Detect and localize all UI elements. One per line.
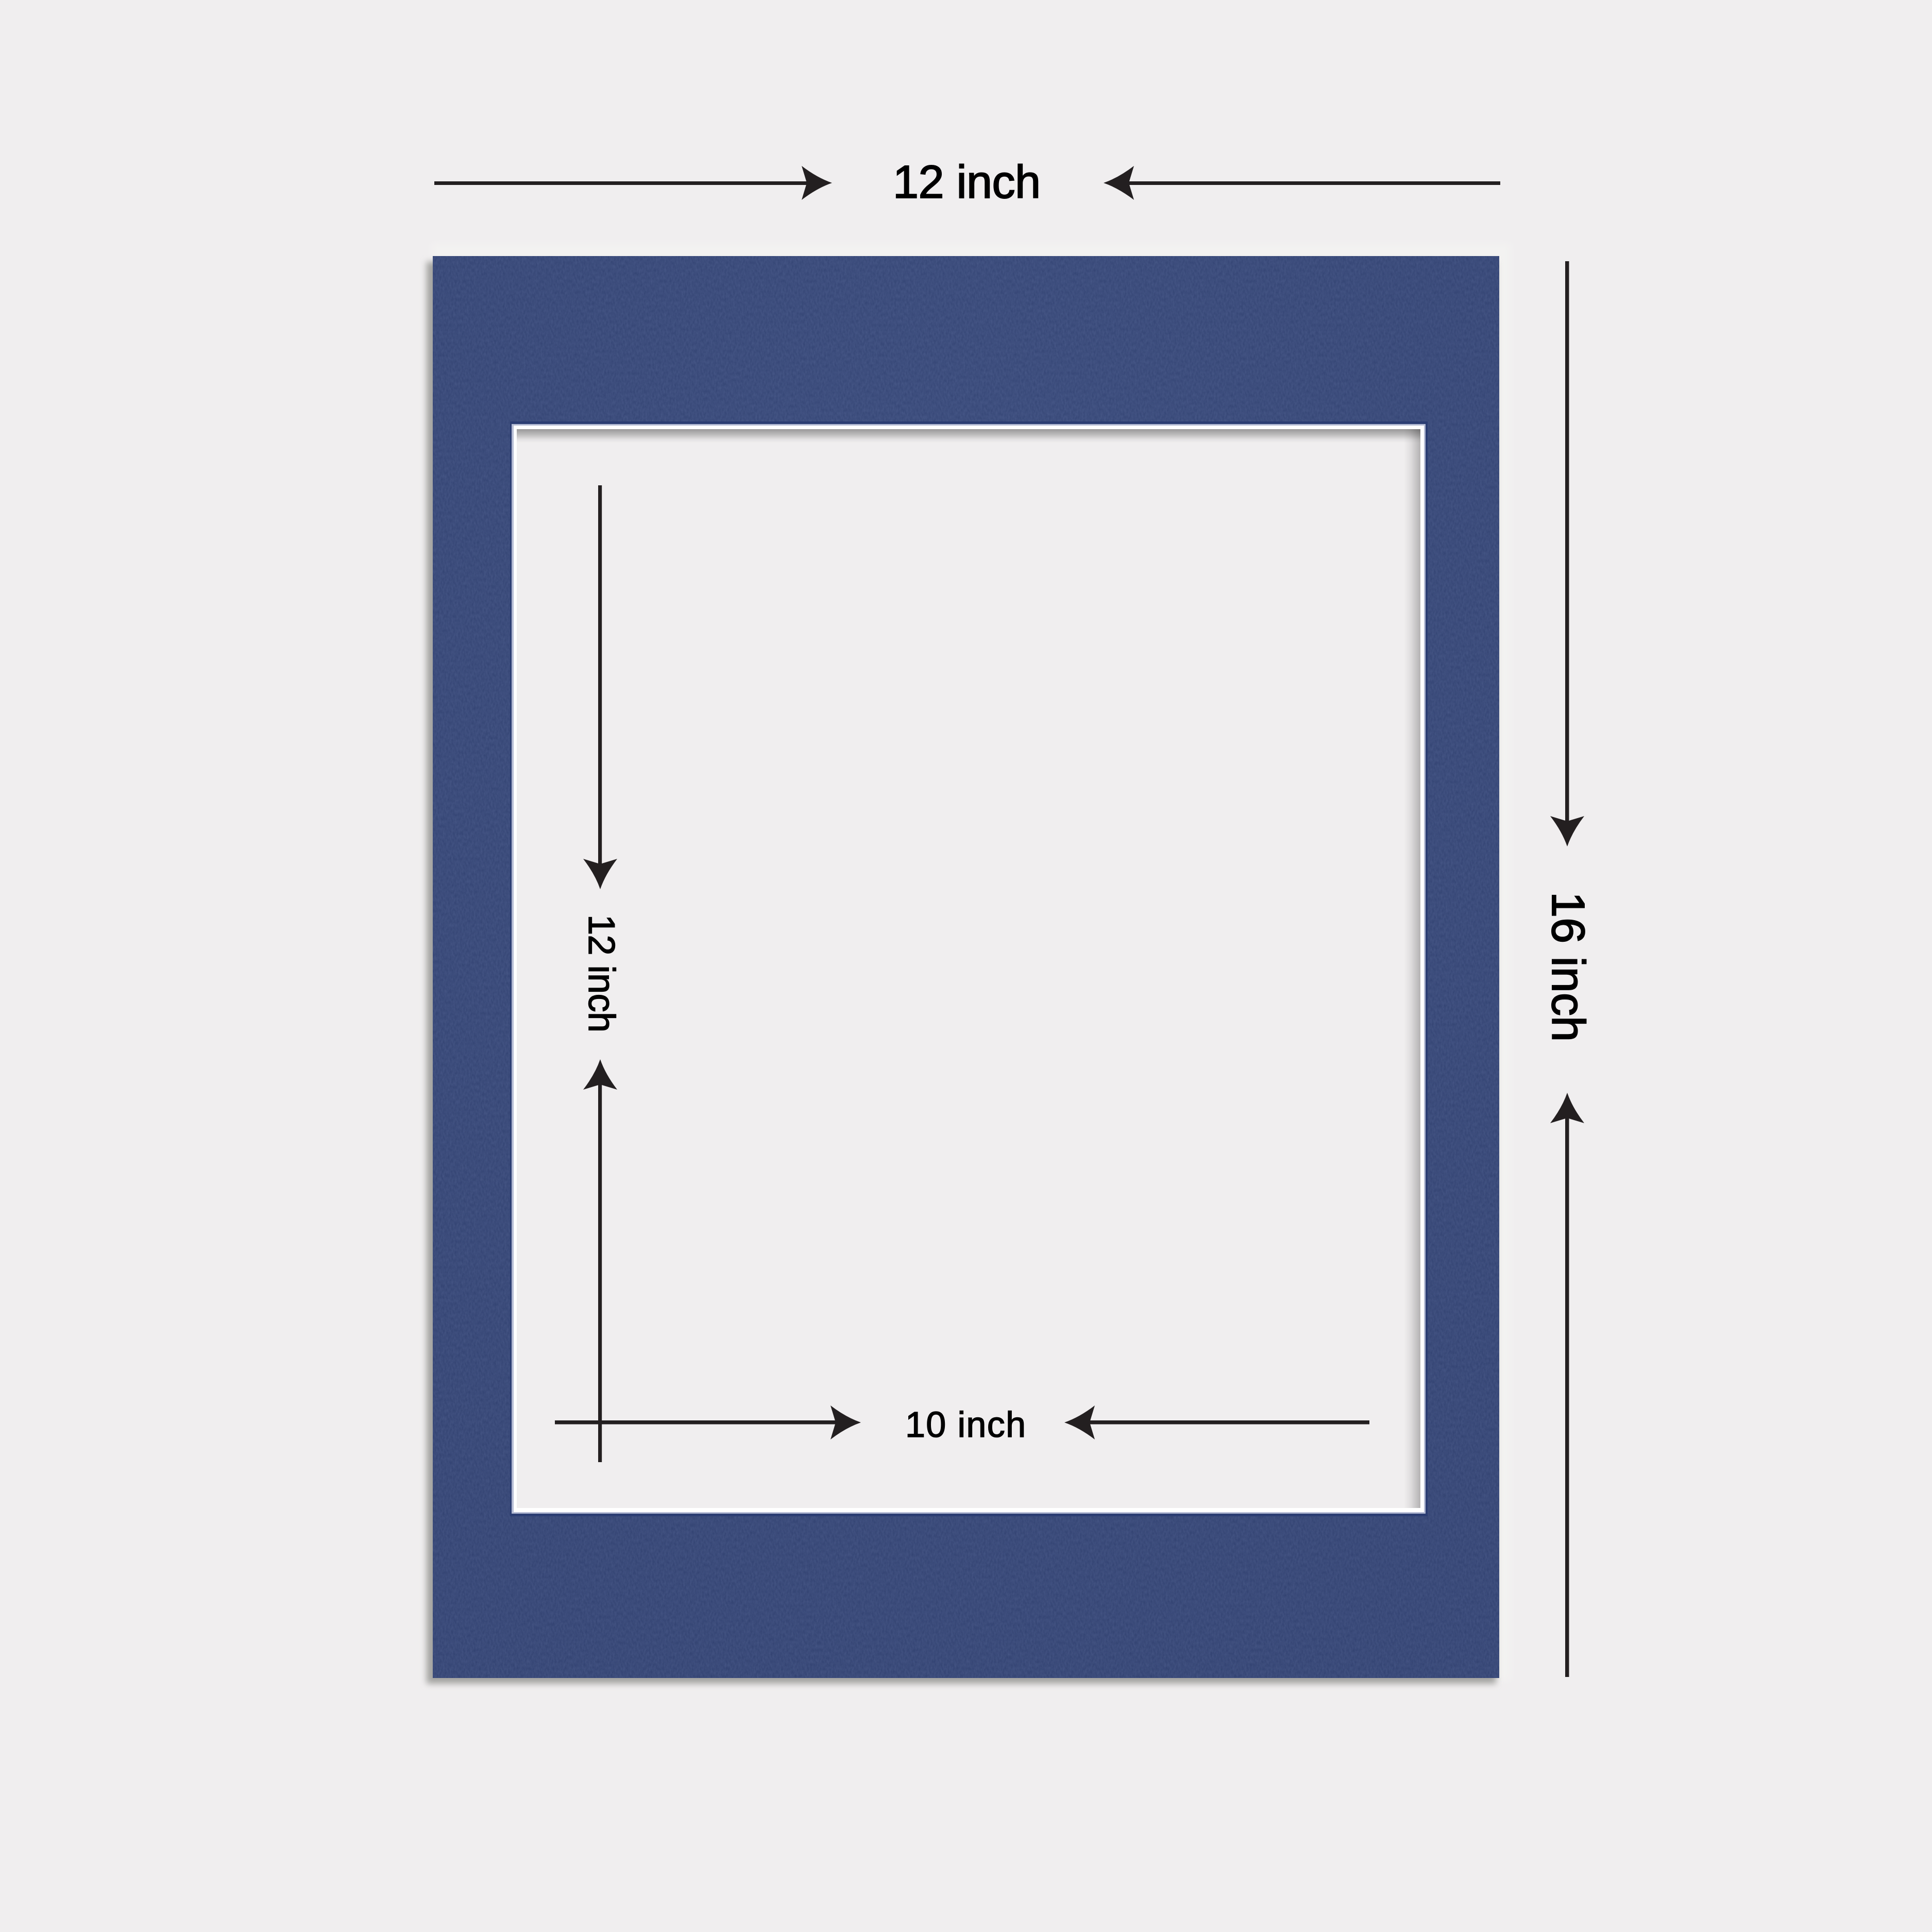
arrow: upward bbox=[583, 1059, 617, 1462]
window bevel bbox=[510, 421, 1428, 1516]
mat board bbox=[433, 256, 1499, 1678]
window opening bbox=[517, 429, 1420, 1508]
mat drop shadow bbox=[427, 262, 1496, 1684]
dimension: outer height 16 inch bbox=[1542, 261, 1594, 1677]
label: 10 inch: 10 inch bbox=[905, 1404, 1026, 1445]
arrow: left to right bbox=[434, 166, 832, 200]
arrow: left to right bbox=[555, 1405, 861, 1439]
label: 16 inch: 16 inch bbox=[1542, 892, 1594, 1042]
arrow: downward bbox=[583, 485, 617, 889]
mat highlight halo bbox=[432, 243, 1511, 1681]
dimension: window height 12 inch bbox=[581, 485, 622, 1462]
dimension: outer width 12 inch bbox=[434, 157, 1500, 208]
dimension: window width 10 inch bbox=[555, 1404, 1369, 1445]
arrow: downward bbox=[1550, 261, 1584, 846]
arrow: right to left bbox=[1104, 166, 1500, 200]
panel: navy mat board with cut-out window bbox=[427, 243, 1511, 1684]
arrow: right to left bbox=[1064, 1405, 1369, 1439]
label: 12 inch: 12 inch bbox=[893, 157, 1041, 208]
label: 12 inch: 12 inch bbox=[581, 914, 622, 1032]
inner window shadows bbox=[517, 429, 1420, 1508]
arrow: upward bbox=[1550, 1093, 1584, 1677]
